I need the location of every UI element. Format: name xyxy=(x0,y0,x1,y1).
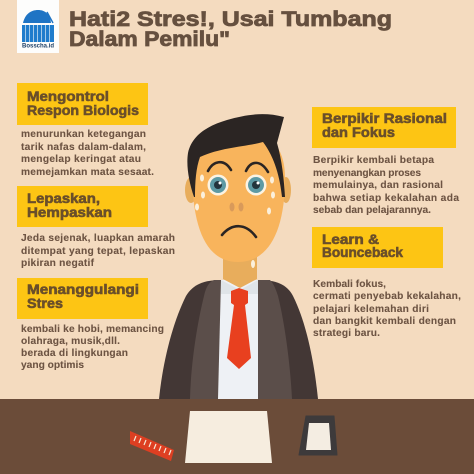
panel: Berpikir Rasional dan Fokus xyxy=(312,107,459,216)
panel: Menanggulangi Stres: kembali ke hobi, memancing xyxy=(21,324,164,335)
panel: Berpikir Rasional dan Fokus: dan Fokus xyxy=(322,124,395,140)
panel: Lepaskan, Hempaskan: Hempaskan xyxy=(27,204,112,220)
panel: Learn and Bounceback: strategi baru. xyxy=(313,328,380,339)
collar xyxy=(221,280,258,294)
panel: Mengontrol Respon Biologis: tarik nafas dalam-dalam, xyxy=(21,142,146,153)
eyes xyxy=(208,174,266,196)
panel: Learn and Bounceback: Kembali fokus, xyxy=(313,279,386,290)
paper xyxy=(185,411,272,463)
panel: Menanggulangi Stres: berada di lingkungan xyxy=(21,348,128,359)
panel: Learn and Bounceback: Bounceback xyxy=(322,244,403,260)
panel: Mengontrol Respon Biologis xyxy=(17,83,154,178)
title: Dalam Pemilu" xyxy=(69,28,230,51)
panel: Learn and Bounceback: dan bangkit kembali dengan xyxy=(313,316,456,327)
panel: Berpikir Rasional dan Fokus: Berpikir Rasional xyxy=(322,110,447,126)
jacket xyxy=(159,280,318,399)
left lapel xyxy=(190,280,222,399)
panel: Mengontrol Respon Biologis: menurunkan ketegangan xyxy=(21,129,146,140)
mouth xyxy=(222,226,256,237)
panel: Mengontrol Respon Biologis: Mengontrol xyxy=(27,88,109,104)
panel: Lepaskan, Hempaskan: pikiran negatif xyxy=(21,258,95,269)
panel: Menanggulangi Stres xyxy=(17,278,164,371)
panel: Menanggulangi Stres: Menanggulangi xyxy=(27,281,139,297)
panel: Lepaskan, Hempaskan: Lepaskan, xyxy=(27,190,100,206)
hair xyxy=(187,114,285,197)
desk xyxy=(0,399,474,474)
panel: Berpikir Rasional dan Fokus: menyenangkan proses xyxy=(313,168,421,179)
panel: Berpikir Rasional dan Fokus: memulainya, dan rasional xyxy=(313,180,443,191)
panel: Berpikir Rasional dan Fokus: sebab dan pelajarannya. xyxy=(313,205,431,216)
right lapel xyxy=(258,280,292,399)
tablet xyxy=(299,416,337,455)
neck xyxy=(223,255,257,288)
panel: Lepaskan, Hempaskan: ditempat yang tepat, lepaskan xyxy=(21,246,175,257)
panel: Learn and Bounceback xyxy=(312,227,461,339)
panel: Menanggulangi Stres: yang optimis xyxy=(21,360,84,371)
panel: Mengontrol Respon Biologis: memejamkan mata sesaat. xyxy=(21,167,154,178)
panel: Learn and Bounceback: cermati penyebab kekalahan, xyxy=(313,291,461,302)
panel: Mengontrol Respon Biologis: mengelap keringat atau xyxy=(21,154,141,165)
panel: Menanggulangi Stres: Stres xyxy=(27,295,63,311)
nose xyxy=(230,202,244,212)
illustration: stressed man xyxy=(159,114,318,399)
eyebrows xyxy=(208,162,268,172)
panel: Mengontrol Respon Biologis: Respon Biologis xyxy=(27,102,139,118)
panel: Lepaskan, Hempaskan: Jeda sejenak, luapkan amarah xyxy=(21,233,175,244)
title: Hati2 Stres!, Usai Tumbang xyxy=(69,8,392,31)
tie xyxy=(227,288,251,369)
shirt xyxy=(218,280,258,399)
title xyxy=(69,8,392,51)
panel: Lepaskan, Hempaskan xyxy=(17,186,175,269)
panel: Berpikir Rasional dan Fokus: Berpikir kembali betapa xyxy=(313,155,434,166)
panel: Learn and Bounceback: pelajari kelemahan diri xyxy=(313,304,429,315)
panel: Learn and Bounceback: Learn & xyxy=(322,231,379,247)
sweat drops xyxy=(195,174,275,268)
ruler xyxy=(130,431,174,461)
panel: Berpikir Rasional dan Fokus: bahwa setiap kekalahan ada xyxy=(313,193,459,204)
face xyxy=(192,130,285,262)
ears xyxy=(185,177,291,203)
panel: Menanggulangi Stres: olahraga, musik,dll. xyxy=(21,336,120,347)
logo: Bosscha.id xyxy=(17,0,59,53)
logo: Bosscha.id: Bosscha.id xyxy=(22,44,54,50)
